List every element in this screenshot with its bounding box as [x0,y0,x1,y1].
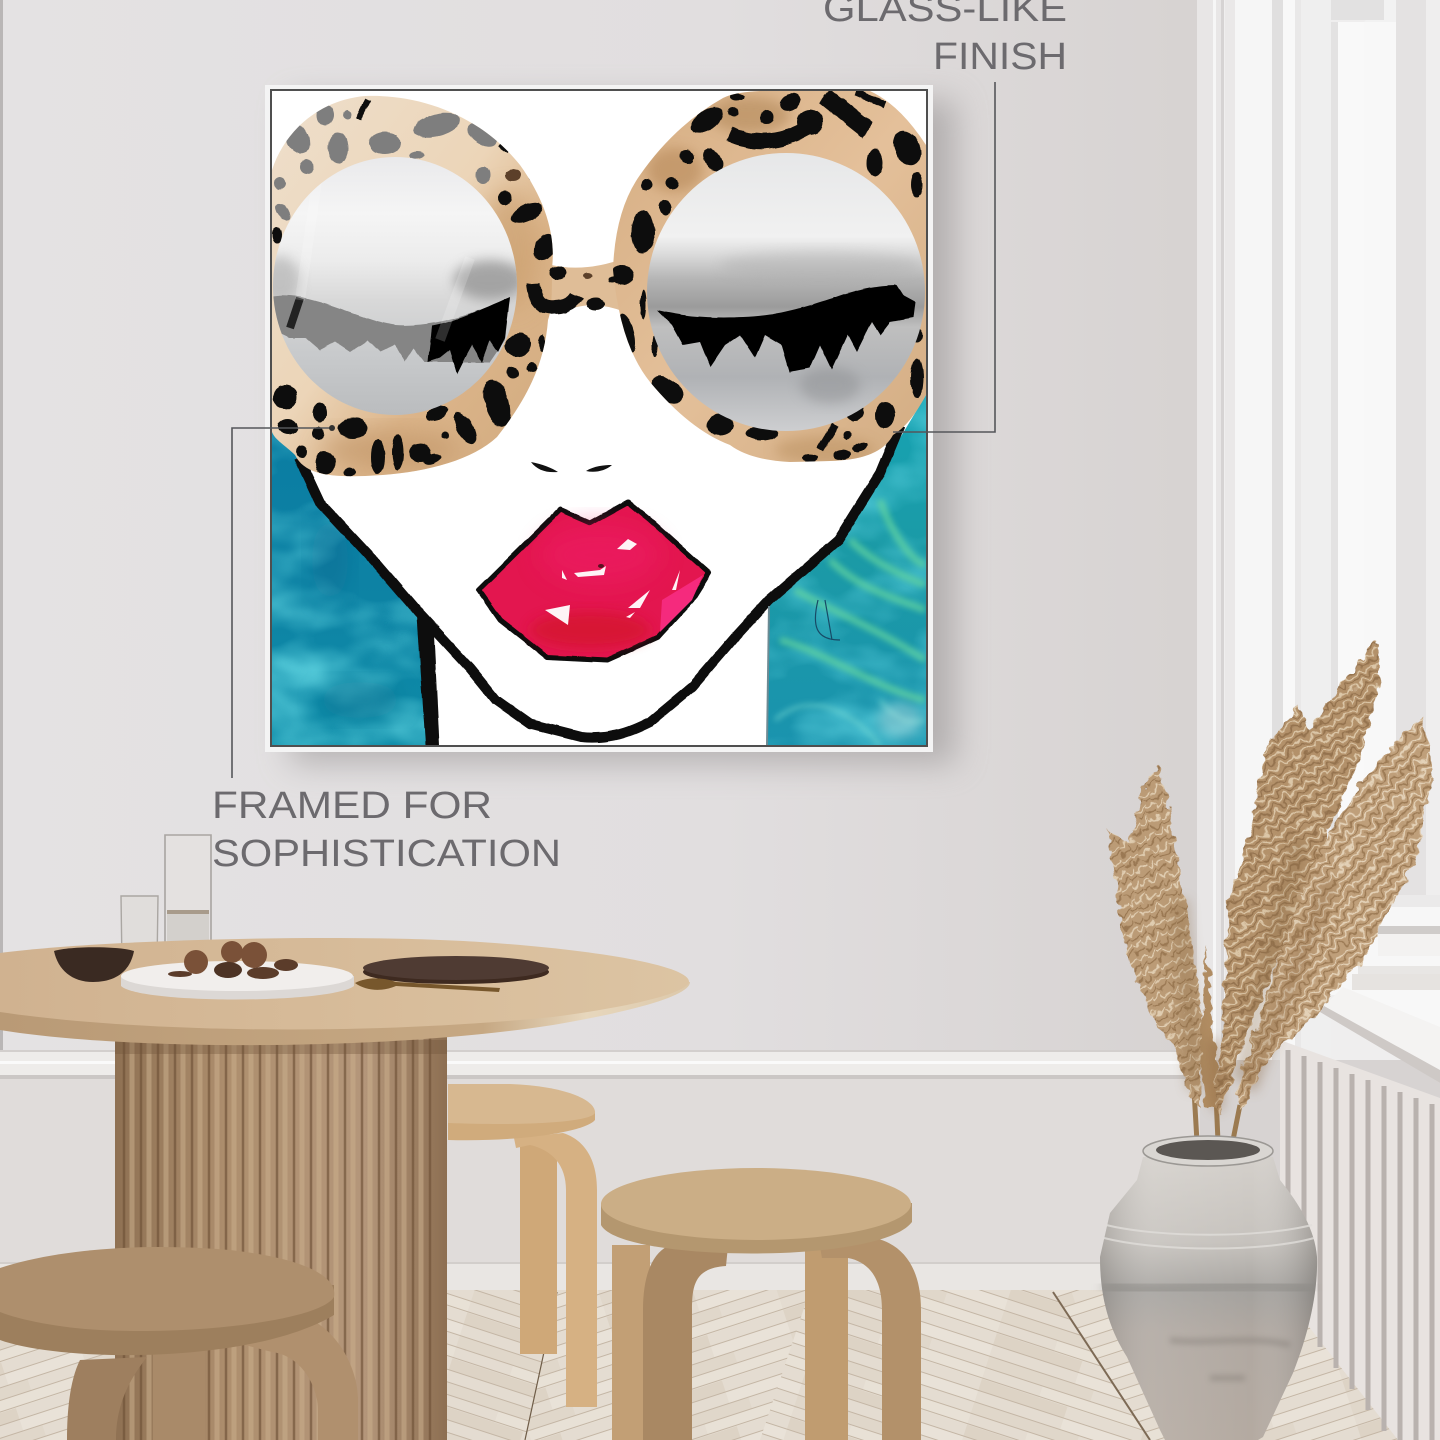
callout: framed for sophistication [212,425,561,875]
table settings [54,941,549,1000]
baseboard [0,1262,1200,1292]
leader line right [893,82,995,432]
framed artwork [260,85,956,764]
tall center plume [1213,640,1380,1115]
thin middle plume [1200,945,1220,1110]
right eyelashes [657,285,915,372]
left lens [273,157,517,415]
window frame and moldings [1197,0,1440,1060]
tabletop edge [0,982,690,1045]
round wooden table [0,938,690,1440]
ceramic vase [1100,1136,1317,1440]
nose [531,462,612,472]
frame shadow [290,100,956,764]
glass carafe and tumbler [121,835,211,966]
art canvas [260,90,930,745]
dark plate [363,956,549,984]
pampas grass plumes [1107,640,1433,1145]
white frame [265,85,933,752]
callout: framed for sophistication: SOPHISTICATION [212,833,561,875]
callout: glass-like finish [823,0,1067,432]
left frame dark spots [272,100,561,477]
lower wall panel [0,1078,1200,1268]
marble plate [121,961,354,1000]
herringbone wooden floor [0,1290,1440,1440]
spoon [355,978,500,992]
left eyelashes [428,297,510,374]
tabletop [0,938,689,1030]
stool right [601,1168,921,1440]
table pedestal [115,1030,447,1440]
leader line left [232,428,333,778]
dark bowl [54,947,134,982]
left frame gray faded spots [273,104,500,222]
vase rim [1143,1136,1273,1166]
left frame [270,90,560,480]
teal background right [767,395,926,745]
teal background left [272,432,426,745]
face outline [299,400,900,745]
wall chair rail [0,1050,1200,1079]
right lens [645,152,929,434]
gray reflected lash band [273,295,510,362]
label text: FRAMED FOR [212,785,492,827]
bridge spots [533,266,616,310]
stool left [0,1247,358,1440]
right plume [1236,715,1433,1112]
stems [1194,1090,1240,1145]
callout: glass-like finish: FINISH [933,36,1067,78]
lips [479,502,709,660]
stool back [448,1084,597,1407]
left plume [1107,765,1202,1105]
radiator [1280,1040,1440,1440]
right frame dark spots [610,90,926,462]
nuts [168,941,298,979]
right frame [610,90,930,465]
window sill with books [1320,926,1440,1083]
sunglasses bridge [551,262,619,310]
